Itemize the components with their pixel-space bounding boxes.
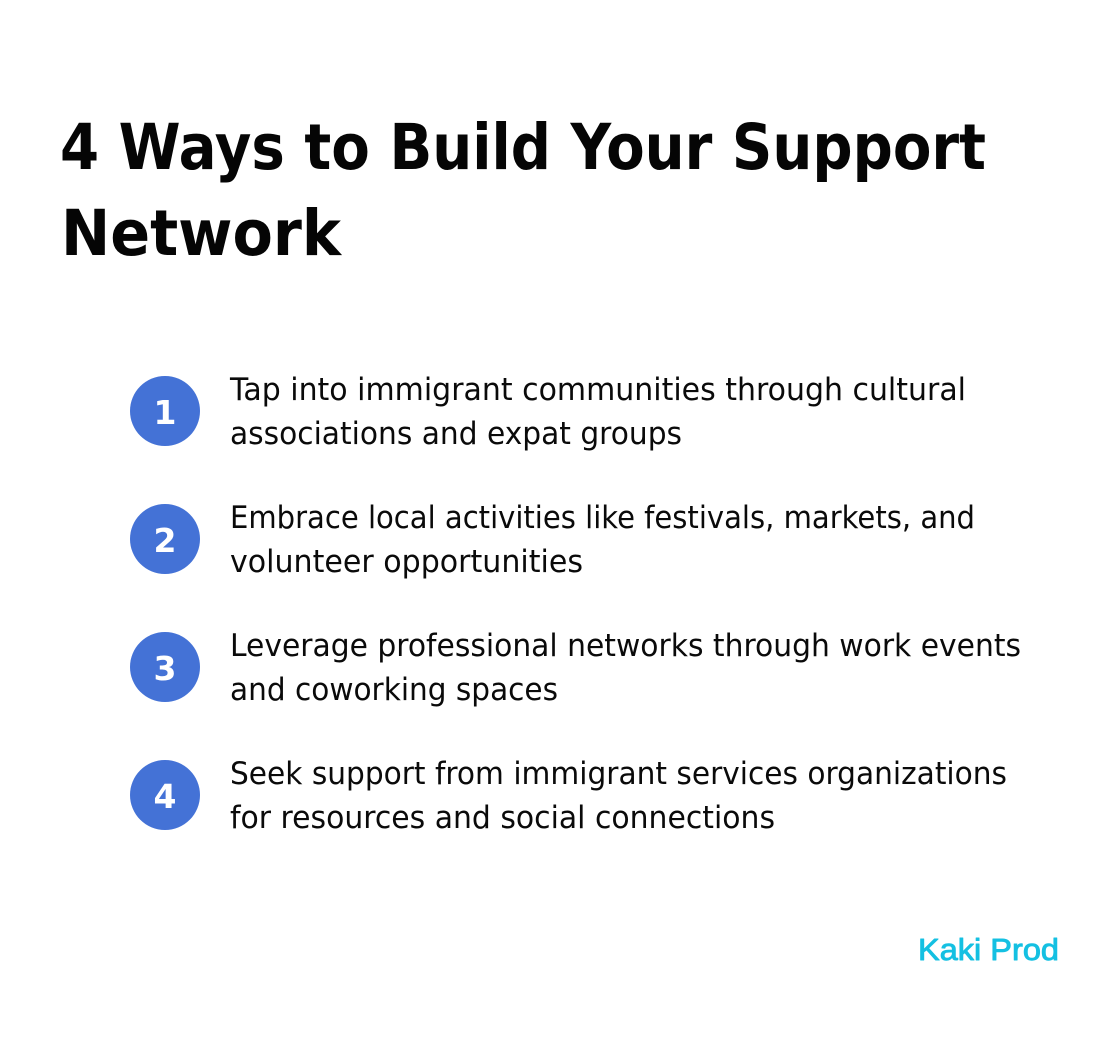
icon: number 1 badge: 1 [154, 393, 176, 432]
text: item 1: associations and expat groups [230, 416, 682, 452]
text: item 1 [229, 372, 966, 452]
list item 3 [130, 628, 1021, 708]
icon: number 2 badge: 2 [154, 521, 176, 560]
text: item 3: and coworking spaces [230, 672, 558, 708]
text: item 3: Leverage professional networks through work events [230, 628, 1021, 664]
list item 2 [130, 500, 975, 580]
title: Network [61, 197, 343, 270]
text: item 4: Seek support from immigrant services organizations [230, 756, 1007, 792]
text: item 4: for resources and social connections [230, 800, 775, 836]
text: item 3 [230, 628, 1021, 708]
list item 1 [130, 372, 966, 452]
icon: number 2 badge [130, 504, 200, 574]
text: item 4 [230, 756, 1007, 836]
text: item 1: Tap into immigrant communities through cultural [229, 372, 966, 408]
text: item 2: Embrace local activities like festivals, markets, and [230, 500, 975, 536]
icon: number 3 badge [130, 632, 200, 702]
icon: number 4 badge [130, 760, 200, 830]
text: item 2: volunteer opportunities [230, 544, 583, 580]
text: item 2 [230, 500, 975, 580]
icon: number 1 badge [130, 376, 200, 446]
icon: number 3 badge: 3 [154, 649, 176, 688]
title [60, 111, 986, 270]
icon: number 4 badge: 4 [154, 777, 176, 816]
title: 4 Ways to Build Your Support [60, 111, 986, 184]
list item 4 [130, 756, 1007, 836]
logo: Kaki Prod: Kaki Prod [918, 932, 1059, 967]
